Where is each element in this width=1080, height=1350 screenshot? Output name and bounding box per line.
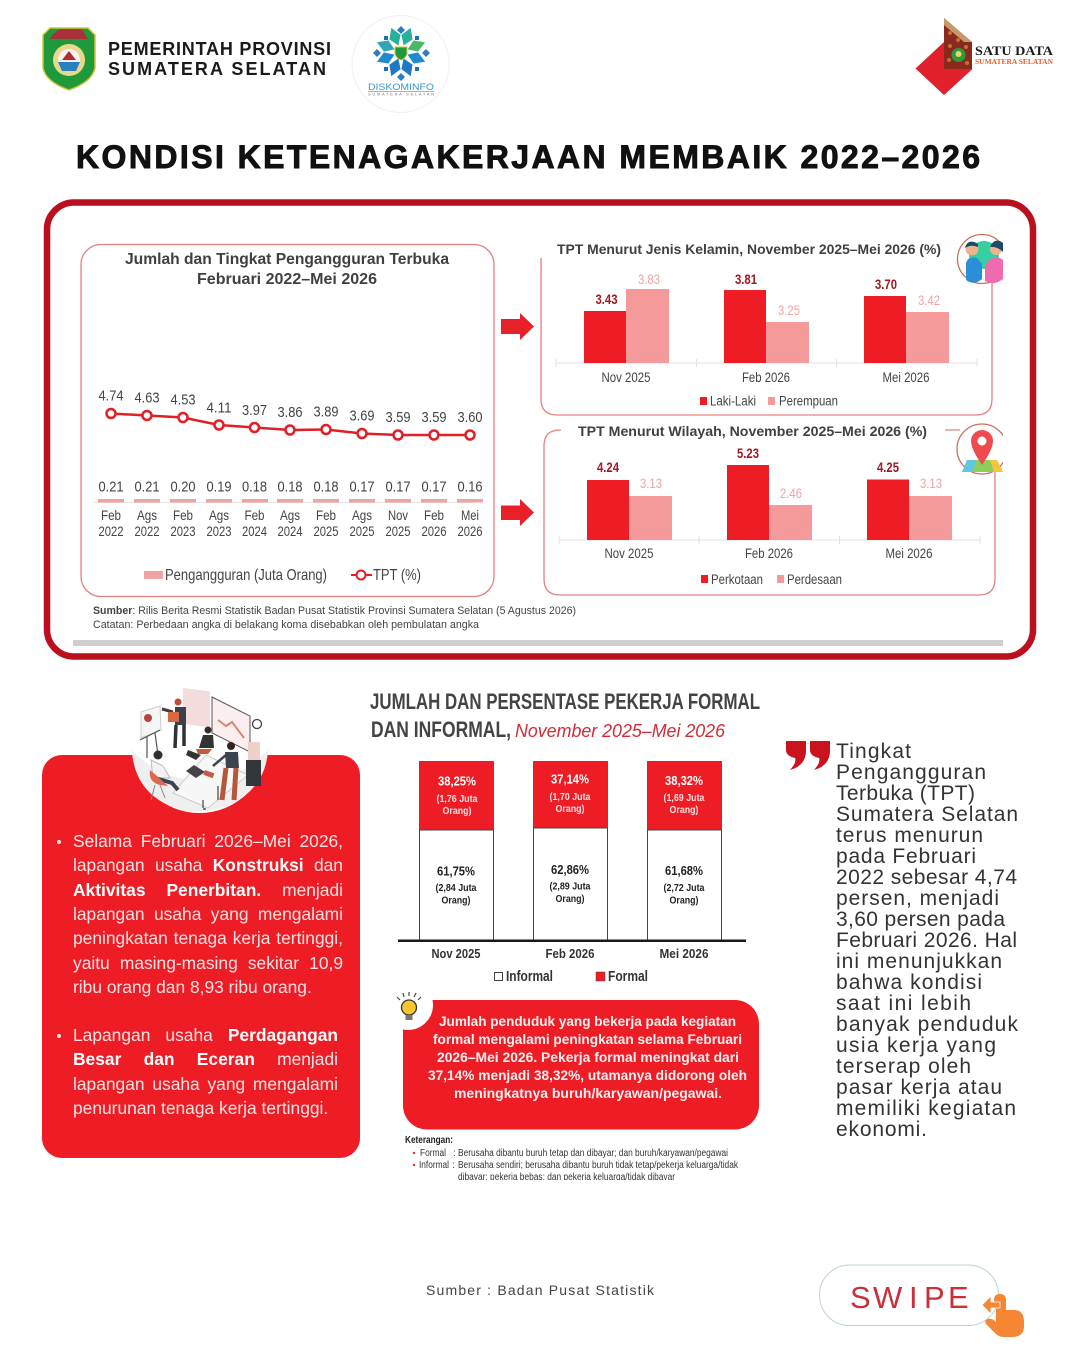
heading: formal and informal workers: November 2025–Mei 2026: [515, 720, 726, 741]
text block: growth sectors: lapangan usaha yang mengalami: [73, 904, 343, 924]
callout text: Jumlah penduduk yang bekerja pada kegiatan: [439, 1014, 736, 1029]
period axis labels: 2026: [422, 523, 447, 539]
quote text: Februari 2026. Hal: [836, 929, 1017, 952]
formal bar values: [436, 772, 705, 817]
unemployment values: 0.17: [350, 478, 374, 496]
informal bar values: Orang): [442, 894, 470, 906]
definitions note: [405, 1135, 739, 1183]
period axis labels: [98, 507, 483, 539]
region legend: [701, 572, 842, 587]
period axis labels: 2023: [206, 523, 232, 539]
TPT values: 4.63: [134, 390, 160, 406]
period axis labels: Ags: [209, 507, 229, 523]
region values: 3.13: [640, 475, 662, 491]
period axis labels: Feb: [424, 507, 444, 523]
heading: formal and informal workers: JUMLAH DAN PERSENTASE PEKERJA FORMAL: [370, 689, 760, 714]
definitions note: dibayar; pekerja bebas; dan pekerja keluarga/tidak dibayar: [458, 1172, 676, 1183]
bullet: first point: [57, 840, 61, 844]
period axis labels: Nov: [388, 507, 408, 523]
gender legend: Perempuan: [779, 394, 838, 408]
icon: quotation mark: [786, 741, 830, 770]
formal bar values: 38,25%: [438, 774, 476, 788]
gender legend: [700, 394, 838, 408]
region category labels: Mei 2026: [886, 545, 933, 561]
text block: declining sector: lapangan usaha yang mengalami: [73, 1074, 338, 1094]
callout text: 2026–Mei 2026. Pekerja formal meningkat dari: [437, 1050, 739, 1065]
logo: Satu Data: [916, 18, 1053, 95]
quote text: Tingkat: [836, 740, 911, 763]
unemployment values: 0.21: [98, 478, 124, 496]
informal bar values: Orang): [670, 894, 698, 906]
logo: Diskominfo: DISKOMINFO: [368, 82, 434, 93]
region chart heading: TPT Menurut Wilayah, November 2025–Mei 2026 (%): [578, 423, 927, 439]
gender bars: [556, 289, 977, 367]
gender category labels: [602, 369, 930, 385]
stacked bar chart: formal vs informal: [398, 762, 746, 985]
chart legend: TPT (%): [373, 567, 421, 584]
quote text: ini menunjukkan: [836, 950, 1002, 973]
callout text: meningkatnya buruh/karyawan/pegawai.: [454, 1086, 722, 1101]
panel: unemployment frame: [47, 202, 1033, 656]
formal bar values: Orang): [670, 804, 698, 816]
icon: swipe hand: [982, 1294, 1024, 1337]
quote text: Sumatera Selatan: [836, 803, 1018, 826]
TPT values: 3.97: [242, 402, 267, 419]
formal bar values: Orang): [556, 803, 584, 815]
quote text: pada Februari: [836, 845, 976, 868]
text block: growth sectors: Selama Februari 2026–Mei 2026,: [73, 831, 343, 851]
panel: TPT by gender: [541, 234, 1006, 415]
period axis labels: 2023: [170, 523, 196, 539]
TPT values: 3.69: [350, 408, 374, 424]
text block: declining sector: penurunan tenaga kerja tertinggi.: [73, 1098, 328, 1118]
text block: declining sector: [73, 1025, 338, 1118]
definitions note: Keterangan:: [405, 1135, 453, 1146]
title: KONDISI KETENAGAKERJAAN MEMBAIK 2022–2026: [76, 139, 980, 175]
panel: TPT by region: [544, 423, 1007, 595]
period axis labels: 2025: [314, 523, 339, 539]
text block: growth sectors: Aktivitas Penerbitan. menjadi: [73, 880, 343, 900]
informal bar values: 61,68%: [665, 863, 703, 878]
unemployment values: 0.17: [422, 478, 446, 496]
chart heading: [125, 251, 449, 288]
unemployment values: 0.21: [134, 478, 160, 496]
swipe button: [820, 1265, 1024, 1337]
quote text: Terbuka (TPT): [836, 782, 975, 805]
TPT values: 4.53: [170, 392, 196, 408]
TPT values: 4.11: [206, 400, 232, 416]
quote text: usia kerja yang: [836, 1034, 996, 1057]
quote text: memiliki kegiatan: [836, 1097, 1016, 1120]
quote text: [836, 740, 1018, 1141]
panel: sector card background: [42, 755, 360, 1158]
informal bar values: (2,89 Juta: [550, 880, 591, 892]
bar category labels: [432, 947, 709, 961]
bar legend: [494, 968, 648, 985]
chart heading: Jumlah dan Tingkat Pengangguran Terbuka: [125, 251, 449, 268]
informal bar values: Orang): [556, 893, 584, 905]
TPT values: 3.89: [314, 404, 338, 420]
logo: Diskominfo: SUMATERA SELATAN: [368, 92, 434, 96]
text block: growth sectors: ribu orang dan 8,93 ribu orang.: [73, 977, 312, 997]
period axis labels: Feb: [173, 507, 193, 523]
TPT values: 3.60: [458, 409, 482, 426]
header: government name: [108, 39, 331, 79]
quote text: persen, menjadi: [836, 887, 999, 910]
text block: declining sector: Lapangan usaha Perdagangan: [73, 1025, 338, 1045]
region legend: Perdesaan: [787, 572, 842, 587]
informal bar values: 62,86%: [551, 862, 589, 877]
source note: Catatan: Perbedaan angka di belakang koma disebabkan oleh pembulatan angka: [93, 619, 480, 631]
icon: South Sumatra provincial shield: [43, 28, 95, 90]
gender chart heading: TPT Menurut Jenis Kelamin, November 2025–Mei 2026 (%): [557, 241, 941, 257]
period axis labels: 2025: [386, 523, 411, 539]
gender values: 3.83: [638, 271, 660, 287]
TPT values: [98, 388, 482, 426]
callout text: formal mengalami peningkatan selama Februari: [433, 1032, 742, 1047]
period axis labels: 2025: [350, 523, 375, 539]
period axis labels: Feb: [244, 507, 265, 523]
TPT values: 3.59: [422, 409, 446, 426]
formal bar values: (1,76 Juta: [436, 793, 478, 805]
callout: formal workers increased: [383, 980, 759, 1130]
callout text: [428, 1014, 747, 1101]
heading: formal and informal workers: DAN INFORMAL,: [371, 717, 511, 742]
unemployment values: 0.16: [458, 478, 482, 496]
icon: light bulb: [397, 992, 421, 1020]
gender legend: Laki-Laki: [710, 394, 756, 408]
gender values: 3.25: [778, 302, 800, 318]
quote text: terserap oleh: [836, 1055, 971, 1078]
period axis labels: 2024: [278, 523, 303, 539]
TPT values: 3.59: [386, 409, 410, 426]
informal bar values: (2,72 Juta: [664, 882, 705, 894]
region values: [597, 445, 942, 501]
gender category labels: Feb 2026: [742, 369, 790, 385]
region bars: [559, 465, 980, 544]
informal bar values: 61,75%: [437, 864, 475, 878]
bar legend: Formal: [608, 968, 648, 985]
quote text: 2022 sebesar 4,74: [836, 866, 1017, 889]
period axis labels: Mei: [461, 507, 479, 523]
callout text: 37,14% menjadi 38,32%, utamanya didorong oleh: [428, 1068, 747, 1083]
chart heading: Februari 2022–Mei 2026: [197, 271, 377, 288]
illustration: office team: [132, 677, 268, 813]
quote text: saat ini lebih: [836, 992, 971, 1015]
quote text: ekonomi.: [836, 1118, 927, 1141]
text block: growth sectors: [73, 831, 343, 997]
definitions note: :: [452, 1160, 455, 1171]
source note: Sumber: Rilis Berita Resmi Statistik Badan Pusat Statistik Provinsi Sumatera Selatan (5 Agustus 2026): [93, 605, 576, 617]
quote text: pasar kerja atau: [836, 1076, 1002, 1099]
region values: 4.25: [877, 459, 899, 475]
period axis labels: 2026: [458, 523, 483, 539]
region category labels: Feb 2026: [745, 545, 793, 561]
gender category labels: Mei 2026: [882, 369, 930, 385]
text block: growth sectors: yaitu masing-masing sekitar 10,9: [73, 953, 343, 973]
bar category labels: Feb 2026: [546, 947, 595, 961]
region category labels: [604, 545, 933, 561]
arrow: to region chart: [501, 499, 534, 526]
formal bar values: (1,69 Juta: [664, 792, 705, 804]
heading: formal and informal workers: [370, 689, 760, 742]
definitions note: :: [453, 1148, 456, 1159]
quote text: bahwa kondisi: [836, 971, 982, 994]
region values: 5.23: [737, 445, 759, 461]
region values: 3.13: [920, 475, 942, 491]
period axis labels: 2022: [98, 523, 124, 539]
region values: 4.24: [597, 459, 619, 475]
gender category labels: Nov 2025: [602, 369, 651, 385]
logo: Diskominfo: [352, 16, 449, 112]
unemployment bars: [93, 499, 483, 503]
unemployment values: 0.17: [386, 478, 410, 496]
definitions note: Informal: [419, 1160, 449, 1171]
bar category labels: Nov 2025: [432, 947, 481, 961]
bar legend: Informal: [506, 968, 553, 985]
logo: Satu Data: SATU DATA: [975, 44, 1053, 58]
unemployment values: 0.18: [278, 478, 302, 496]
quote text: 3,60 persen pada: [836, 908, 1005, 931]
informal bar values: (2,84 Juta: [436, 882, 477, 894]
period axis labels: Ags: [137, 507, 157, 523]
panel: unemployment line chart: [81, 244, 494, 596]
unemployment values: 0.20: [170, 478, 196, 496]
text block: growth sectors: peningkatan tenaga kerja tertinggi,: [73, 928, 343, 948]
gender values: 3.81: [735, 271, 757, 287]
chart legend: Pengangguran (Juta Orang): [165, 567, 327, 584]
period axis labels: Ags: [280, 507, 300, 523]
period axis labels: Ags: [352, 507, 372, 523]
quote text: Pengangguran: [836, 761, 986, 784]
footer source: Sumber : Badan Pusat Statistik: [426, 1282, 655, 1298]
definitions note: Berusaha dibantu buruh tetap dan dibayar; dan buruh/karyawan/pegawai: [458, 1148, 728, 1159]
quote text: banyak penduduk: [836, 1013, 1018, 1036]
period axis labels: 2024: [242, 523, 267, 539]
unemployment values: [98, 478, 482, 496]
unemployment values: 0.18: [314, 478, 338, 496]
swipe button: SWIPE: [850, 1280, 969, 1315]
gender values: [596, 271, 940, 318]
icon: people: [958, 234, 1006, 284]
quote text: terus menurun: [836, 824, 983, 847]
gender values: 3.43: [596, 291, 618, 307]
logo: Satu Data: SUMATERA SELATAN: [975, 58, 1053, 66]
unemployment values: 0.18: [242, 478, 267, 496]
arrow: to gender chart: [501, 313, 534, 340]
period axis labels: Feb: [101, 507, 121, 523]
icon: map pin: [957, 424, 1007, 474]
formal bar values: 38,32%: [665, 773, 703, 788]
header: government name: PEMERINTAH PROVINSI: [108, 39, 331, 59]
period axis labels: Feb: [316, 507, 336, 523]
definitions note: Formal: [420, 1148, 446, 1159]
formal bar values: 37,14%: [551, 772, 589, 786]
region legend: Perkotaan: [711, 572, 763, 587]
bar category labels: Mei 2026: [660, 947, 709, 961]
header: government name: SUMATERA SELATAN: [108, 59, 326, 79]
unemployment values: 0.19: [206, 478, 232, 496]
formal bar values: Orang): [442, 805, 472, 817]
gender values: 3.70: [875, 276, 897, 292]
period axis labels: 2022: [134, 523, 160, 539]
TPT values: 3.86: [278, 404, 302, 421]
informal bar values: [436, 862, 705, 906]
text block: growth sectors: lapangan usaha Konstruksi dan: [73, 855, 343, 875]
TPT line series: [106, 409, 474, 440]
definitions note: Berusaha sendiri; berusaha dibantu buruh tidak tetap/pekerja keluarga/tidak: [458, 1160, 739, 1171]
gender values: 3.42: [918, 292, 940, 308]
text block: declining sector: Besar dan Eceran menjadi: [73, 1049, 338, 1069]
region values: 2.46: [780, 485, 802, 501]
source note: [93, 605, 576, 631]
formal bar values: (1,70 Juta: [550, 791, 591, 803]
bullet: second point: [57, 1034, 61, 1038]
TPT values: 4.74: [98, 388, 124, 404]
region category labels: Nov 2025: [604, 545, 654, 561]
